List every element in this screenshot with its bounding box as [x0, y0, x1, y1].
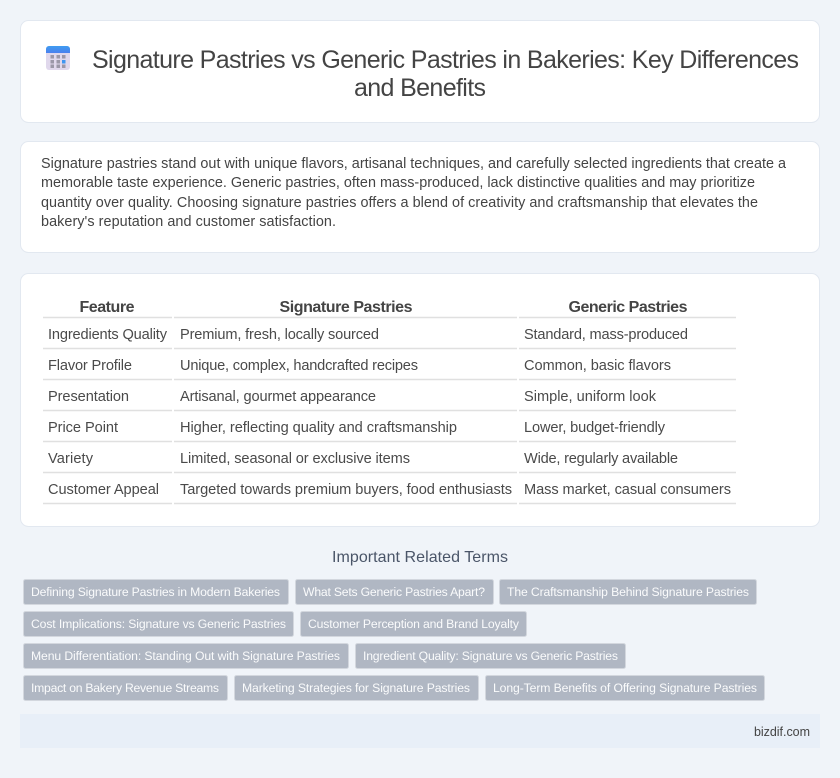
- panel: comparison table: [20, 274, 820, 526]
- tag: Impact on Bakery Revenue Streams: [31, 681, 219, 695]
- tag: Customer Perception and Brand Loyalty: [308, 617, 520, 631]
- text block: introduction: memorable taste experience. Generic pastries, often mass-produced, lack distinctive qualities and may prioritize: [41, 175, 755, 191]
- row: customer appeal: Mass market, casual consumers: [524, 482, 731, 498]
- tag: The Craftsmanship Behind Signature Pastries: [507, 585, 749, 599]
- row: variety: Wide, regularly available: [524, 451, 678, 467]
- tag: [500, 580, 756, 604]
- row: flavor profile: Flavor Profile: [48, 358, 132, 374]
- row: ingredients quality: Standard, mass-produced: [524, 327, 688, 343]
- row: flavor profile: [48, 358, 671, 374]
- row: ingredients quality: Ingredients Quality: [48, 327, 168, 343]
- row: ingredients quality: Premium, fresh, locally sourced: [180, 327, 379, 343]
- tag: [24, 676, 228, 700]
- row: price point: Higher, reflecting quality and craftsmanship: [180, 420, 457, 436]
- tag: Marketing Strategies for Signature Pastries: [242, 681, 470, 695]
- title: [92, 46, 799, 102]
- table header: Feature: [80, 299, 135, 316]
- table header: Signature Pastries: [280, 299, 413, 316]
- footer: [20, 714, 820, 748]
- row: customer appeal: Customer Appeal: [48, 482, 159, 498]
- tags: related terms: [24, 580, 764, 700]
- text block: introduction: Signature pastries stand out with unique flavors, artisanal techniques, and carefully selected ingredients that create a: [41, 156, 786, 172]
- tag: [486, 676, 764, 700]
- row: flavor profile: Common, basic flavors: [524, 358, 671, 374]
- row: variety: Limited, seasonal or exclusive items: [180, 451, 410, 467]
- row: presentation: [48, 389, 657, 405]
- row: price point: Price Point: [48, 420, 118, 436]
- text block: introduction: bakery's reputation and customer satisfaction.: [41, 214, 336, 230]
- title: and Benefits: [354, 74, 486, 102]
- row: flavor profile: Unique, complex, handcrafted recipes: [180, 358, 418, 374]
- row: price point: [48, 420, 666, 436]
- row: presentation: Presentation: [48, 389, 129, 405]
- table header: Generic Pastries: [568, 299, 688, 316]
- tag: Cost Implications: Signature vs Generic Pastries: [31, 617, 286, 631]
- icon: calendar: [46, 46, 70, 70]
- tag: [296, 580, 494, 604]
- row: ingredients quality: [48, 327, 688, 343]
- tag: [356, 644, 626, 668]
- tag: [24, 612, 294, 636]
- tag: Long-Term Benefits of Offering Signature Pastries: [493, 681, 757, 695]
- row: price point: Lower, budget-friendly: [524, 420, 666, 436]
- heading: important related terms: Important Related Terms: [332, 549, 508, 566]
- tag: [234, 676, 478, 700]
- table header: [80, 299, 688, 316]
- row: customer appeal: Targeted towards premium buyers, food enthusiasts: [180, 482, 512, 498]
- text block: introduction: [41, 156, 786, 230]
- tag: [24, 644, 348, 668]
- panel: title card: [20, 20, 820, 122]
- panel: introduction: [20, 142, 820, 252]
- tag: [300, 612, 526, 636]
- tag: Menu Differentiation: Standing Out with Signature Pastries: [31, 649, 340, 663]
- row: customer appeal: [48, 482, 731, 498]
- tag: [24, 580, 288, 604]
- row: presentation: Simple, uniform look: [524, 389, 657, 405]
- row: presentation: Artisanal, gourmet appearance: [180, 389, 376, 405]
- tag: Defining Signature Pastries in Modern Bakeries: [31, 585, 280, 599]
- tag: Ingredient Quality: Signature vs Generic Pastries: [363, 649, 618, 663]
- row: variety: [48, 451, 678, 467]
- footer: bizdif.com: [754, 725, 810, 739]
- title: Signature Pastries vs Generic Pastries in Bakeries: Key Differences: [92, 46, 799, 74]
- tag: What Sets Generic Pastries Apart?: [303, 585, 485, 599]
- row: variety: Variety: [48, 451, 94, 467]
- text block: introduction: quantity over quality. Choosing signature pastries offers a blend of creativity and craftsmanship that elevates the: [41, 195, 758, 211]
- table grid lines: [43, 318, 736, 504]
